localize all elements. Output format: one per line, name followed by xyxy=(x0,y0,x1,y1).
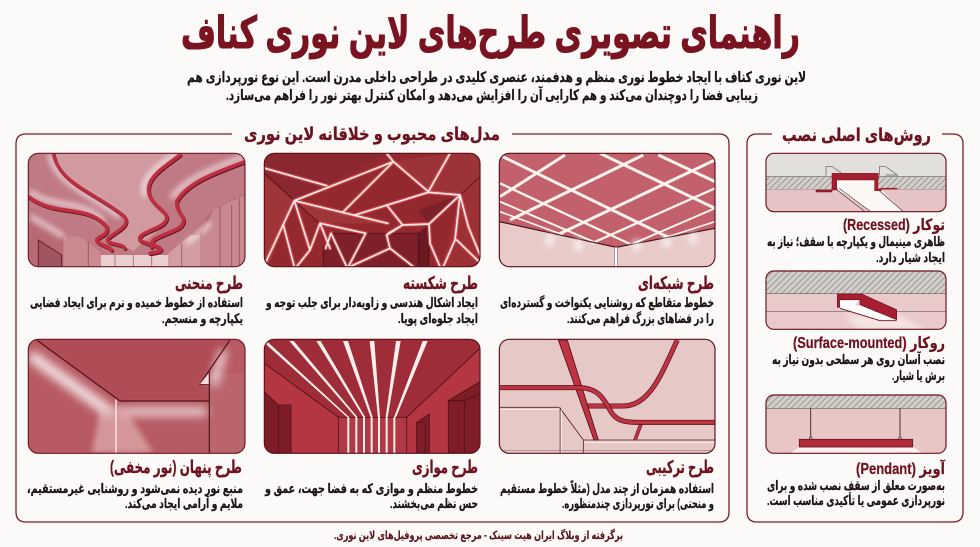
description: pendant xyxy=(767,478,945,508)
description: parallel xyxy=(264,481,478,511)
description: hidden: منبع نور دیده نمی‌شود و روشنایی غیرمستقیم، xyxy=(27,481,243,496)
image: curved ceiling xyxy=(28,153,246,267)
description: hidden xyxy=(27,481,243,511)
card: curved design xyxy=(28,153,246,326)
card: broken design xyxy=(264,153,480,326)
diagram: surface-mounted profile xyxy=(766,271,946,329)
description: surface-mounted xyxy=(772,351,945,383)
heading: recessed: توکار (Recessed) xyxy=(843,217,945,234)
method: surface-mounted xyxy=(766,271,946,383)
description: grid: را در فضاهای بزرگ فراهم می‌کنند. xyxy=(567,311,714,326)
heading: pendant: آویز (Pendant) xyxy=(856,459,946,478)
image: grid ceiling xyxy=(499,153,715,267)
method: pendant xyxy=(766,395,946,508)
heading: surface-mounted: روکار (Surface-mounted) xyxy=(793,335,945,352)
heading: grid: طرح شبکه‌ای xyxy=(638,273,714,294)
intro paragraph xyxy=(187,70,806,104)
description: curved xyxy=(30,295,243,326)
heading: curved: طرح منحنی xyxy=(175,273,243,294)
panel: popular models xyxy=(16,124,729,522)
image: parallel lines xyxy=(264,339,480,453)
heading: parallel: طرح موازی xyxy=(412,457,478,478)
description: combined: استفاده همزمان از چند مدل (مثلاً خطوط مستقیم xyxy=(500,480,714,496)
image: combined strips xyxy=(499,339,715,453)
description: hidden: ملایم و آرامی ایجاد می‌کند. xyxy=(125,495,243,511)
description: combined: و منحنی) برای نورپردازی چندمنظوره. xyxy=(562,496,714,511)
diagram: recessed profile xyxy=(766,153,946,212)
footer source note: برگرفته از وبلاگ ایران هیت سینک - مرجع تخصصی پروفیل‌های لاین نوری. xyxy=(334,528,623,543)
description: broken: ایجاد اشکال هندسی و زاویه‌دار برای جلب توجه و xyxy=(265,295,478,310)
description: curved: یکپارچه و منسجم. xyxy=(162,311,243,326)
description: grid: خطوط متقاطع که روشنایی یکنواخت و گسترده‌ای xyxy=(500,295,714,310)
description: parallel: خطوط منظم و موازی که به فضا جهت، عمق و xyxy=(264,481,478,496)
panel: installation methods xyxy=(747,125,963,522)
heading: combined: طرح ترکیبی xyxy=(646,457,714,478)
intro paragraph: زیبایی فضا را دوچندان می‌کند و هم کارایی آن را افزایش می‌دهد و امکان کنترل بهتر نور را فراهم می‌سازد. xyxy=(226,86,758,104)
card: grid design xyxy=(499,153,715,326)
description: recessed: ایجاد شیار دارد. xyxy=(876,250,945,265)
description: surface-mounted: برش یا شیار. xyxy=(892,368,945,383)
heading: broken: طرح شکسته xyxy=(403,273,478,294)
diagram: pendant fixture xyxy=(766,395,946,453)
image: angular lines xyxy=(264,153,480,267)
description: curved: استفاده از خطوط خمیده و نرم برای ایجاد فضایی xyxy=(30,295,243,311)
description: combined xyxy=(500,480,714,511)
heading: installation methods: روش‌های اصلی نصب xyxy=(782,125,931,146)
heading: hidden: طرح پنهان (نور مخفی) xyxy=(110,457,242,478)
description: broken xyxy=(265,295,478,326)
card: parallel design xyxy=(264,339,480,511)
heading: popular models: مدل‌های محبوب و خلاقانه لاین نوری xyxy=(244,124,500,145)
description: broken: ایجاد جلوه‌ای پویا. xyxy=(398,311,478,326)
description: grid xyxy=(500,295,714,326)
image: hidden light xyxy=(28,339,245,453)
description: parallel: حس نظم می‌بخشند. xyxy=(390,496,478,511)
card: hidden design xyxy=(27,339,245,511)
description: recessed xyxy=(767,234,945,265)
method: recessed xyxy=(766,153,946,265)
card: combined design xyxy=(499,339,715,511)
